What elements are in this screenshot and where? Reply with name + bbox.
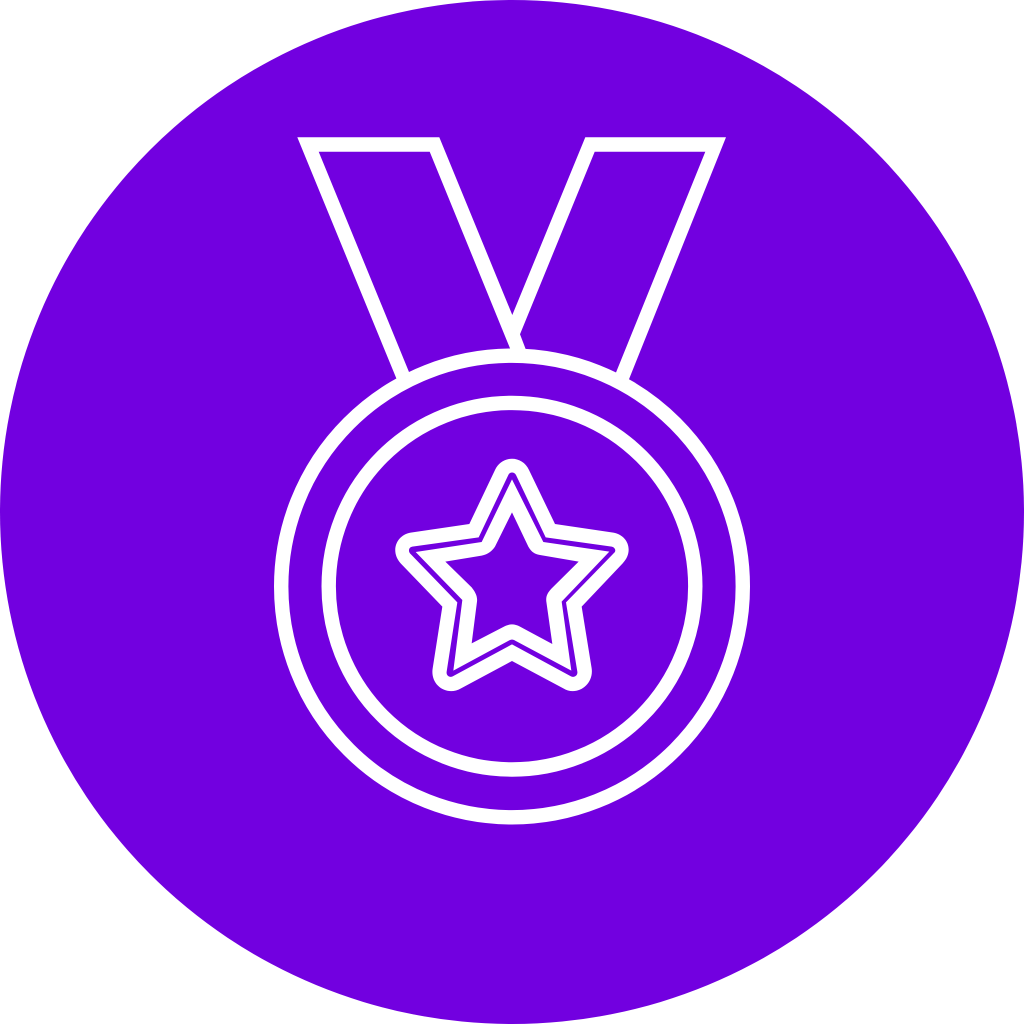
icon: outer medal ring (281, 356, 743, 817)
icon: star (395, 459, 629, 691)
icon: medal (281, 137, 743, 817)
star inner purple centre (445, 512, 579, 644)
icon: inner medal ring (329, 403, 695, 770)
star thin purple line (409, 472, 615, 677)
star outer white outline (395, 459, 629, 691)
icon: ribbon (297, 137, 726, 380)
